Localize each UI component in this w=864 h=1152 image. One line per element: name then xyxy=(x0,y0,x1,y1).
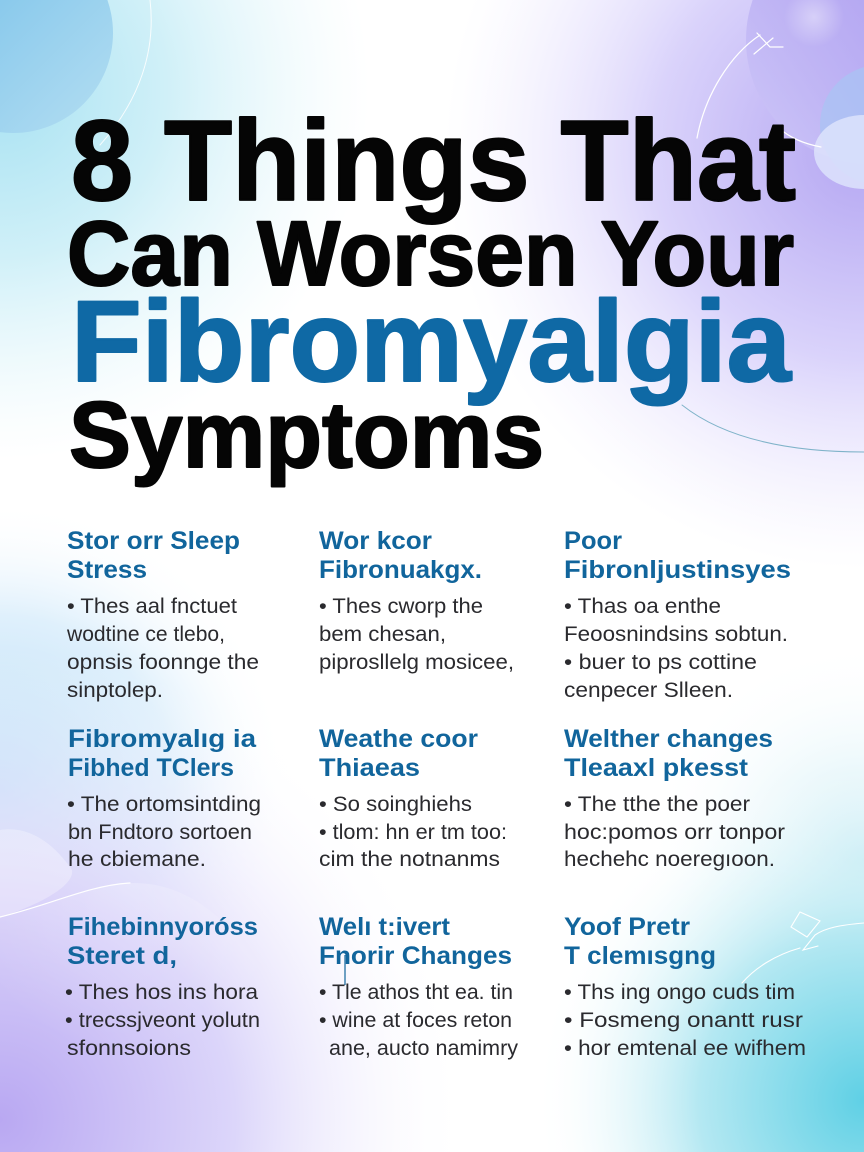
panel: item 8: Fnorir Changes xyxy=(319,942,512,970)
panel: item 9: T clemısgng xyxy=(564,942,716,970)
panel: item 2: bem chesan, xyxy=(319,623,446,646)
panel: item 5: • tlom: hn er tm too: xyxy=(319,821,507,844)
panel: item 6: hechehc noeregıoon. xyxy=(564,848,775,871)
decorative circle top left xyxy=(0,0,113,133)
panel: item 3: • Thas oa enthe xyxy=(564,595,721,618)
decorative hill bottom left xyxy=(0,829,72,917)
panel: item 4: he cbiemane. xyxy=(68,848,206,871)
panel: item 6 xyxy=(564,725,785,871)
panel: item 1: Stress xyxy=(67,556,147,584)
panel: item 9: Yoof Pretr xyxy=(564,913,690,941)
title line 1: 8 Things That xyxy=(71,98,796,225)
panel: item 2: Fibronuakgx. xyxy=(319,556,482,584)
panel: item 7: sfonnsoions xyxy=(67,1037,191,1060)
panel: item 7: Steret d, xyxy=(67,942,177,970)
panel: item 5: Thiaeas xyxy=(319,754,420,782)
panel: item 6: hoc:pomos orr tonpor xyxy=(564,821,785,844)
title line 4: Symptoms xyxy=(69,382,544,487)
panel: item 2: Wor kcor xyxy=(319,527,432,555)
panel: item 8: ane, aucto namimry xyxy=(329,1037,519,1060)
decorative circles top right xyxy=(746,0,864,189)
panel: item 6: • The tthe the poer xyxy=(564,793,750,816)
panel: item 1 xyxy=(66,527,259,702)
panel: item 1: wodtine ce tlebo, xyxy=(66,623,225,646)
panel: item 1: sinptolep. xyxy=(67,679,163,702)
panel: item 1: Stor orr Sleep xyxy=(67,527,240,555)
panel: item 1: opnsis foonnge the xyxy=(67,651,259,674)
panel: item 3 xyxy=(564,527,791,702)
panel: item 5: • So soinghiehs xyxy=(319,793,472,816)
panel: item 7: • trecssjveont yolutn xyxy=(65,1009,260,1032)
panel: item 6: Tleaaxl pkesst xyxy=(564,754,749,782)
panel: item 4: Fibromyalıg ia xyxy=(68,725,257,753)
panel: item 3: Poor xyxy=(564,527,622,555)
panel: item 7 xyxy=(65,913,260,1060)
panel: item 8: Welı t:ivert xyxy=(319,913,451,941)
panel: item 5 xyxy=(319,725,507,871)
panel: item 8 xyxy=(319,913,519,1060)
panel: item 3: cenpecer Slleen. xyxy=(564,679,733,702)
title xyxy=(67,98,796,487)
panel: item 6: Welther changes xyxy=(564,725,773,753)
panel: item 5: Weathe coor xyxy=(319,725,478,753)
panel: item 3: • buer to ps cottine xyxy=(564,651,757,674)
panel: item 8: • Tle athos tht ea. tin xyxy=(319,981,513,1004)
panel: item 2 xyxy=(319,527,514,674)
panel: item 2: piprosllelg mosicee, xyxy=(319,651,514,674)
panel: item 7: Fihebinnyoróss xyxy=(68,913,258,941)
panel: item 9: • Fosmeng onantt rusr xyxy=(564,1009,803,1032)
panel: item 4 xyxy=(67,725,261,871)
title line 3 highlighted: Fibromyalgia xyxy=(71,278,792,406)
panel: item 4: bn Fndtoro sortoen xyxy=(68,821,252,844)
panel: item 2: • Thes cworp the xyxy=(319,595,483,618)
panel: item 9 xyxy=(564,913,806,1060)
panel: item 7: • Thes hos ins hora xyxy=(65,981,258,1004)
panel: item 4: • The ortomsintding xyxy=(67,793,261,816)
panel: item 1: • Thes aal fnctuet xyxy=(67,595,237,618)
decorative wave bottom left xyxy=(0,883,300,1152)
panel: item 8: • wine at foces reton xyxy=(319,1009,512,1032)
title line 2: Can Worsen Your xyxy=(67,203,794,305)
panel: item 5: cim the notnanms xyxy=(319,848,500,871)
panel: item 3: Fibronljustinsyes xyxy=(564,556,791,584)
panel: item 9: • Ths ing ongo cuds tim xyxy=(564,981,795,1004)
panel: item 4: Fibhed TClers xyxy=(68,754,234,782)
panel: item 3: Feoosnindsins sobtun. xyxy=(564,623,788,646)
panel: item 9: • hor emtenal ee wifhem xyxy=(564,1037,806,1060)
